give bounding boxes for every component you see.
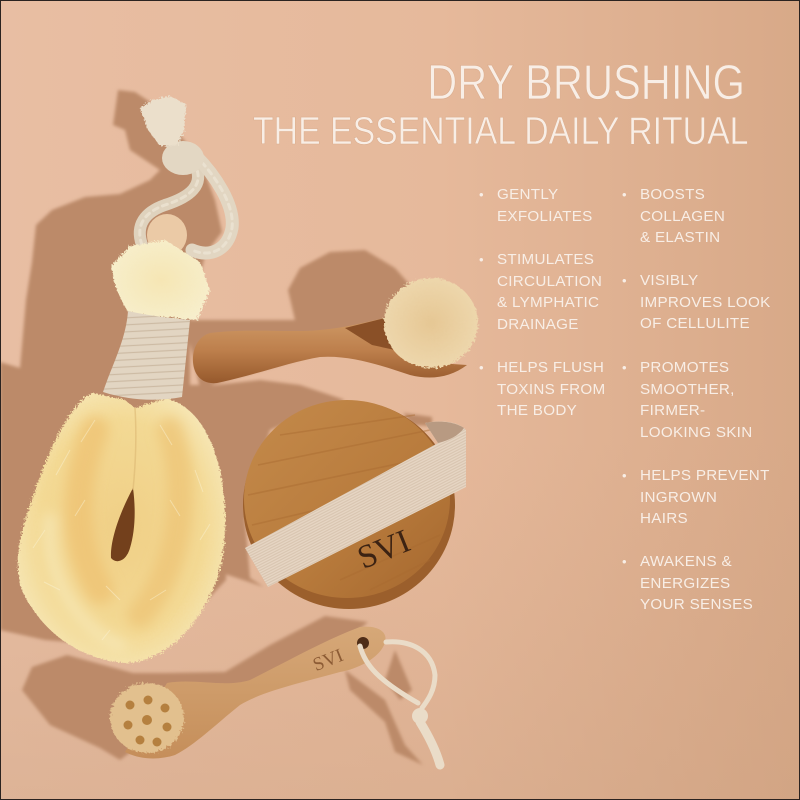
logo: SVI [310, 645, 346, 676]
benefit: circulation [497, 249, 602, 335]
face brush [193, 278, 478, 383]
benefit: toxins [497, 357, 606, 422]
fibre strands [33, 420, 210, 640]
benefit: smoother skin [640, 357, 752, 443]
fibre shading [50, 430, 180, 645]
benefit: toxins: HELPS FLUSH [497, 359, 604, 376]
benefit: cellulite: OF CELLULITE [640, 315, 750, 332]
benefit: toxins: TOXINS FROM [497, 381, 606, 398]
benefit: cellulite: IMPROVES LOOK [640, 294, 770, 311]
benefit: senses: AWAKENS & [640, 553, 732, 570]
benefit: ingrown hairs [640, 465, 770, 530]
benefit: collagen [640, 184, 725, 249]
benefit: ingrown hairs: INGROWN [640, 489, 717, 506]
logo monogram: SVI [353, 523, 415, 577]
benefit: circulation: CIRCULATION [497, 273, 602, 290]
benefit: senses: YOUR SENSES [640, 596, 753, 613]
wooden bead [147, 214, 187, 256]
top fibre tuft [112, 240, 210, 320]
centre slot [111, 488, 135, 561]
benefit: exfoliates: EXFOLIATES [497, 208, 593, 225]
benefit: smoother skin: SMOOTHER, [640, 381, 735, 398]
benefit: cellulite: VISIBLY [640, 272, 698, 289]
round bamboo brush [243, 400, 466, 609]
benefit: collagen: & ELASTIN [640, 229, 720, 246]
benefit: circulation: & LYMPHATIC [497, 294, 599, 311]
benefit: exfoliates: GENTLY [497, 186, 558, 203]
benefits right column [622, 186, 770, 613]
benefits left column [480, 186, 606, 419]
benefit: cellulite [640, 270, 770, 335]
benefit: senses [640, 551, 753, 616]
title: DRY BRUSHING [427, 56, 745, 110]
disc top [244, 400, 450, 598]
subtitle: THE ESSENTIAL DAILY RITUAL [253, 110, 748, 153]
benefit: smoother skin: LOOKING SKIN [640, 424, 752, 441]
benefit: smoother skin: FIRMER- [640, 402, 705, 419]
main fibre oval [18, 393, 225, 663]
handle [125, 627, 386, 758]
small brush [110, 627, 440, 765]
benefit: collagen: COLLAGEN [640, 208, 725, 225]
handle [193, 318, 467, 383]
benefit: ingrown hairs: HELPS PREVENT [640, 467, 770, 484]
benefit: senses: ENERGIZES [640, 575, 730, 592]
benefit: smoother skin: PROMOTES [640, 359, 729, 376]
bristles [384, 278, 478, 368]
fabric strap [245, 421, 466, 587]
benefit: circulation: STIMULATES [497, 251, 594, 268]
rope loop [140, 96, 232, 253]
benefit: collagen: BOOSTS [640, 186, 705, 203]
bristle head [110, 683, 184, 753]
jute wrap [103, 311, 190, 400]
benefit: circulation: DRAINAGE [497, 316, 579, 333]
benefit: ingrown hairs: HAIRS [640, 510, 688, 527]
large body brush [18, 96, 232, 663]
cast shadows [0, 90, 432, 765]
benefit: toxins: THE BODY [497, 402, 577, 419]
cord [360, 642, 440, 765]
hanging hole [357, 637, 369, 649]
benefit: exfoliates [497, 184, 593, 227]
